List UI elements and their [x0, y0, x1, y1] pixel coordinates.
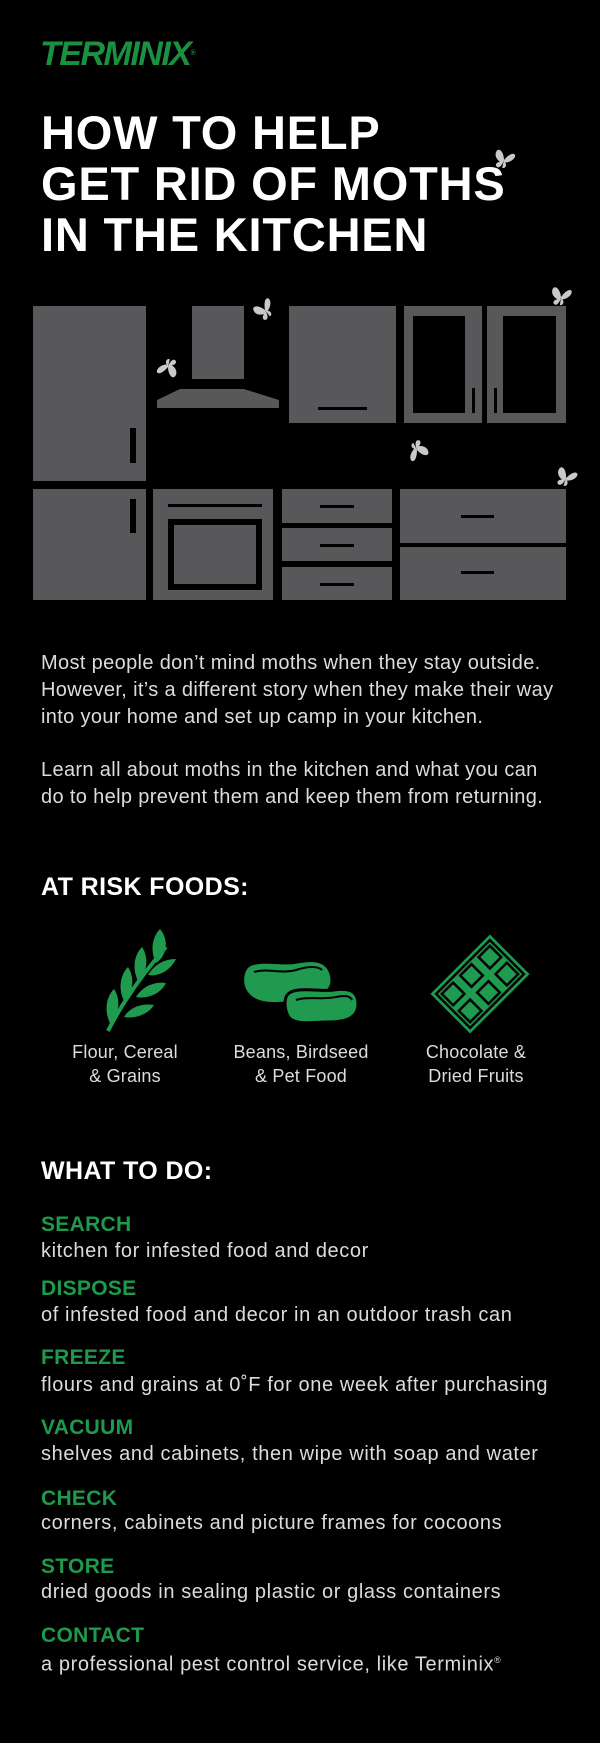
- text: dispose: of infested food and decor in an outdoor trash can: [41, 1304, 512, 1326]
- intro paragraph: into your home and set up camp in your kitchen.: [41, 706, 483, 728]
- step: search: SEARCH: [41, 1213, 131, 1236]
- intro paragraph 2: Learn all about moths in the kitchen and what you can: [41, 759, 538, 781]
- label: chocolate: Dried Fruits: [428, 1066, 524, 1086]
- label: beans: & Pet Food: [255, 1066, 347, 1086]
- title: IN THE KITCHEN: [41, 208, 428, 261]
- label: flour: & Grains: [89, 1066, 161, 1086]
- step: vacuum: VACUUM: [41, 1416, 133, 1439]
- icon: beans: [244, 962, 356, 1022]
- intro paragraph 2: do to help prevent them and keep them from returning.: [41, 786, 543, 808]
- text: vacuum: shelves and cabinets, then wipe with soap and water: [41, 1443, 539, 1465]
- text: freeze: flours and grains at 0˚F for one week after purchasing: [41, 1374, 548, 1396]
- step: check: CHECK: [41, 1487, 117, 1510]
- text: check: corners, cabinets and picture frames for cocoons: [41, 1512, 502, 1534]
- text: search: kitchen for infested food and decor: [41, 1240, 369, 1262]
- label: beans: [233, 1042, 369, 1086]
- label: chocolate: [426, 1042, 526, 1086]
- label: beans: Beans, Birdseed: [233, 1042, 369, 1062]
- icon: chocolate: [430, 934, 530, 1034]
- icon: wheat: [106, 929, 176, 1032]
- heading: what to do: WHAT TO DO:: [41, 1157, 213, 1185]
- intro paragraph: However, it’s a different story when they make their way: [41, 679, 553, 701]
- kitchen illustration: [33, 150, 578, 600]
- text: store: dried goods in sealing plastic or glass containers: [41, 1581, 501, 1603]
- title: GET RID OF MOTHS: [41, 157, 506, 210]
- logo: TERMINIX®: [40, 35, 196, 73]
- intro paragraph: Most people don’t mind moths when they stay outside.: [41, 652, 541, 674]
- heading: at risk foods: AT RISK FOODS:: [41, 873, 249, 901]
- intro paragraph 2: [41, 759, 543, 808]
- label: chocolate: Chocolate &: [426, 1042, 526, 1062]
- intro paragraph: [41, 652, 554, 728]
- title: [41, 106, 506, 261]
- text: contact: a professional pest control service, like Terminix®: [41, 1654, 501, 1676]
- step: freeze: FREEZE: [41, 1346, 126, 1369]
- label: flour: Flour, Cereal: [72, 1042, 178, 1062]
- step: dispose: DISPOSE: [41, 1277, 136, 1300]
- label: flour: [72, 1042, 178, 1086]
- step: contact: CONTACT: [41, 1624, 144, 1647]
- step: store: STORE: [41, 1555, 114, 1578]
- title: HOW TO HELP: [41, 106, 381, 159]
